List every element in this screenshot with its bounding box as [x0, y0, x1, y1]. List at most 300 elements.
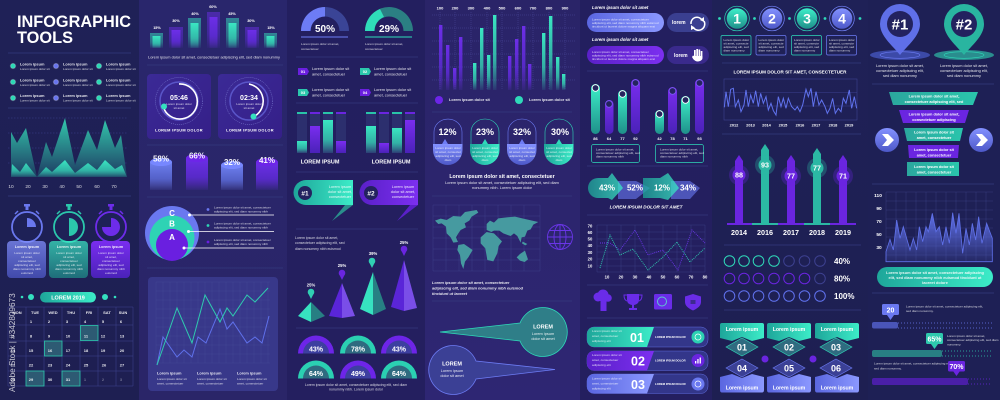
legend grid: Lorem ipsum	[20, 93, 45, 98]
progress bar 65%	[872, 333, 999, 357]
map pin #2: Lorem ipsum dolor sit amet,	[940, 63, 988, 68]
dot progress rows: 100%	[834, 292, 854, 301]
calendar: 4	[84, 319, 87, 324]
vertical bar chart: 800	[546, 6, 553, 10]
row 03: adipiscing elit	[592, 386, 611, 390]
center text block: Lorem ipsum dolor sit amet, consectetuer adipiscing elit, sed diam	[445, 180, 559, 185]
numbered tags: Lorem ipsum dolor sit	[374, 87, 412, 92]
stopwatch purple: Lorem ipsum	[99, 244, 124, 249]
numbered steps: adipiscing elit, sed	[794, 45, 820, 49]
line chart panel: Lorem ipsum dolor sit	[197, 377, 227, 381]
numbered tags: Lorem ipsum dolor sit	[374, 66, 412, 71]
arrow columns: 2018	[809, 228, 825, 237]
numbered steps: 1	[733, 10, 741, 26]
cylinder chart: 58%	[153, 154, 169, 164]
row 02: amet, consectetuer	[592, 358, 618, 362]
timer 02:34: sit amet	[244, 106, 255, 110]
dotted line chart: 40	[588, 243, 593, 248]
venn diagram: Lorem ipsum dolor sit amet, consectetuer	[214, 238, 271, 242]
funnel: consectetuer adipiscing elit, sed	[905, 100, 964, 104]
vertical bar chart: Lorem ipsum dolor sit	[449, 97, 491, 102]
icon: shield	[685, 294, 701, 310]
funnel: amet, consectetuer	[917, 170, 952, 174]
gauge 50%: consectetuer	[301, 47, 319, 51]
pyramid chart: consectetuer adipiscing elit, sed	[295, 241, 345, 245]
bubble #1: consectetuer	[329, 194, 352, 199]
legend grid: Lorem ipsum	[106, 78, 131, 82]
map caption	[432, 280, 524, 296]
teal area chart	[8, 118, 127, 190]
vertical bar chart: 100	[437, 6, 444, 10]
capsule 32%: 32%	[513, 127, 531, 137]
dotted line chart: 30	[633, 274, 638, 280]
funnel: amet, consectetuer	[917, 136, 952, 140]
numbered steps: diam nonummy	[829, 48, 851, 52]
map pin #2: #2	[956, 16, 972, 34]
funnel: consectetuer adipiscing	[912, 118, 956, 122]
line chart panel: amet, consectetuer	[157, 382, 183, 386]
funnel: amet, consectetuer	[917, 154, 952, 158]
capsule 30%: sit amet, consectet	[546, 150, 572, 154]
calendar: SUN	[119, 310, 127, 315]
capsule 30%	[544, 119, 574, 165]
capsule 12%: diam	[445, 158, 452, 162]
bubble #1: dolor sit amet,	[328, 189, 352, 194]
dotted line chart: 20	[588, 256, 593, 262]
yearly line chart: 2014	[762, 122, 772, 128]
stopwatch purple: diam nonummy nibh	[97, 267, 125, 271]
calendar: 16	[48, 348, 53, 353]
dotted line chart: 40	[647, 274, 652, 280]
row 03: 03	[631, 378, 645, 392]
line chart panel	[148, 277, 278, 391]
row 02: 02	[631, 354, 645, 368]
calendar: 20	[120, 348, 125, 353]
row 01: 01	[630, 331, 644, 345]
stopwatch teal	[49, 204, 88, 278]
step cards: Lorem ipsum	[726, 327, 759, 333]
map pin #2: sed diam nonummy	[947, 73, 981, 78]
stopwatch blue: sit amet,	[21, 255, 33, 259]
numbered tags: amet, consectetuer	[312, 92, 346, 98]
teal text pill: laoreet dolore	[922, 280, 949, 285]
pill messages: Lorem ipsum dolor sit amet, consectetuer	[592, 50, 649, 54]
callout blue: Lorem ipsum	[441, 368, 463, 373]
arrow columns: 2016	[757, 228, 773, 237]
numbered steps: diam nonummy	[794, 48, 816, 52]
timer 05:46	[147, 74, 211, 139]
calendar: 15	[29, 348, 34, 353]
capsule 32%: diam	[519, 158, 526, 162]
blue area chart: 90	[876, 206, 882, 212]
venn diagram: Lorem ipsum dolor sit amet, consectetuer	[214, 206, 271, 210]
capsule 23%: Lorem ipsum dolor	[472, 146, 498, 150]
callout teal	[440, 308, 567, 356]
gauge 29%	[365, 7, 413, 51]
pin bars group 1: Lorem ipsum dolor sit amet,	[596, 148, 634, 152]
venn diagram	[145, 206, 274, 261]
row 03: amet, consectetuer	[592, 382, 618, 386]
calendar: TUE	[31, 310, 39, 315]
line chart panel: amet, consectetuer	[237, 382, 263, 386]
arrow columns: 77	[813, 164, 821, 172]
arrow columns	[727, 144, 856, 237]
legend grid: Lorem ipsum	[106, 93, 131, 98]
capsule 12%: sit amet, consectet	[435, 150, 461, 154]
calendar: 7	[12, 334, 15, 338]
timer 02:34	[218, 74, 282, 139]
numbered steps: sit amet, consecte	[724, 42, 749, 46]
stopwatch purple: euismod	[105, 271, 117, 275]
calendar: 5	[102, 319, 105, 324]
line chart panel: Lorem ipsum	[197, 370, 222, 376]
calendar: 28	[11, 377, 16, 382]
icon: cloud money	[594, 290, 612, 311]
gauge 50%: Lorem ipsum dolor sit amet,	[301, 42, 339, 46]
dotted line chart: 50	[588, 236, 593, 242]
capsule 30%: 30%	[551, 127, 569, 137]
arrow columns: 71	[839, 172, 847, 180]
yearly line chart: 2016	[796, 122, 805, 128]
calendar: 18	[84, 348, 89, 353]
capsule 32%: sit amet, consectet	[509, 150, 535, 154]
bubble #2: #2	[367, 190, 375, 198]
icon: hand	[692, 49, 702, 62]
top bar chart	[148, 5, 280, 60]
capsule 12%	[433, 119, 462, 165]
progress bar 70%: sed diam nonummy.	[874, 366, 902, 370]
progress bar 70%: Lorem ipsum dolor sit amet, consectetuer adipiscing elit,	[874, 362, 951, 366]
stopwatch teal: Lorem ipsum dolor	[56, 251, 82, 255]
pill messages: Lorem ipsum dolor sit amet	[592, 37, 649, 42]
calendar: 25	[84, 362, 89, 368]
legend grid: Lorem ipsum dolor sit	[106, 83, 136, 87]
cylinder chart: 66%	[189, 152, 205, 160]
stopwatch blue	[7, 204, 46, 278]
pin bars group 2: consectetuer adipiscing elit, sed	[660, 151, 704, 155]
calendar: 6	[120, 319, 123, 324]
arrow button right	[969, 128, 993, 152]
calendar: 11	[84, 334, 89, 338]
calendar: 12	[101, 334, 106, 338]
line chart panel: Lorem ipsum dolor sit	[157, 377, 187, 381]
numbered steps: Lorem ipsum dolor	[758, 38, 784, 42]
top bar chart: 60%	[209, 5, 217, 9]
top bar chart: 30%	[172, 19, 180, 23]
calendar: 1	[84, 377, 87, 382]
bubble #1: #1	[301, 190, 309, 198]
venn diagram: B	[169, 220, 175, 228]
legend grid: Lorem ipsum dolor sit	[63, 98, 93, 102]
arrow button left	[875, 128, 899, 152]
dot progress rows: 40%	[834, 257, 850, 266]
pill messages: tincidunt ut laoreet dolore magna aliquam erat	[592, 57, 655, 61]
bubble #1: Lorem ipsum	[329, 184, 351, 189]
calendar: SAT	[103, 310, 111, 315]
globe icon	[548, 224, 572, 250]
row 03: Lorem ipsum dolor sit	[592, 376, 622, 380]
pin bars group 1: 92	[633, 136, 638, 141]
line chart panel: Lorem ipsum dolor sit	[237, 377, 267, 381]
vertical bar chart: 300	[468, 6, 475, 10]
yearly line chart: 2015	[779, 122, 788, 128]
percent arrows	[588, 173, 700, 210]
numbered steps: adipiscing elit, sed	[724, 45, 749, 49]
step cards	[720, 323, 859, 392]
cylinder chart: 32%	[224, 158, 240, 167]
pyramid 1: 25%	[307, 282, 315, 288]
yearly line chart: 2012	[730, 122, 739, 128]
pyramid chart: diam nonummy nibh euismod	[295, 247, 341, 251]
pin bars group 2: 78	[670, 136, 675, 141]
teal text pill: elit, sed diam nonummy nibh euismod tincidunt ut	[889, 275, 982, 280]
stopwatch purple: adipiscing elit, sed	[98, 263, 124, 267]
top bar chart: 40%	[191, 12, 199, 16]
vertical bar chart: 200	[452, 6, 459, 10]
calendar: 8	[30, 334, 33, 338]
progress bar 20	[872, 304, 992, 328]
calendar: 23	[48, 362, 53, 368]
dotted line chart: 20	[619, 274, 624, 280]
pill messages: adipiscing elit, sed diam nonummy nibh euismod	[592, 54, 659, 58]
legend grid: Lorem ipsum	[20, 62, 45, 66]
pin bars group 2: Lorem ipsum dolor sit amet,	[660, 148, 698, 152]
dotted line chart: 50	[661, 274, 666, 280]
stopwatch blue: adipiscing elit, sed	[14, 263, 40, 267]
row 03	[587, 374, 708, 394]
top bar chart: 45%	[228, 12, 236, 16]
line chart panel: amet, consectetuer	[197, 382, 223, 386]
stacked bars: LOREM IPSUM	[301, 160, 340, 166]
pin bars group 1: diam nonummy nibh	[596, 154, 624, 158]
step cards: Lorem ipsum	[821, 327, 854, 333]
pill messages: tincidunt ut laoreet dolore magna aliquam erat	[592, 24, 655, 28]
step cards: Lorem ipsum	[773, 386, 806, 392]
line chart panel: Lorem ipsum	[237, 370, 262, 376]
legend grid: Lorem ipsum dolor sit	[20, 83, 50, 87]
percent arrows: 43%	[599, 184, 615, 192]
progress bar 20: Lorem ipsum dolor sit amet, consectetuer adipiscing elit,	[906, 304, 983, 308]
line chart panel: Lorem ipsum	[157, 370, 182, 376]
top bar chart: 15%	[267, 26, 275, 30]
numbered steps	[718, 6, 861, 55]
callout teal: Lorem ipsum	[532, 331, 554, 336]
calendar: MON	[12, 310, 22, 315]
half donut charts: nonummy nibh. Lorem ipsum dolor	[329, 388, 384, 392]
legend grid: Lorem ipsum dolor sit	[106, 98, 136, 102]
timer 05:46: 05:46	[170, 95, 188, 102]
callout blue: LOREM	[442, 362, 462, 368]
stopwatch teal: Lorem ipsum	[57, 244, 82, 249]
calendar: 31	[66, 377, 71, 382]
progress bar 65%: consectetuer adipiscing elit, sed diam	[947, 338, 999, 342]
capsule 23%: 23%	[476, 127, 494, 137]
funnel: Lorem ipsum dolor sit amet,	[909, 112, 959, 116]
row 01: adipiscing elit	[592, 339, 611, 343]
map pin #1: consectetuer adipiscing elit,	[876, 68, 924, 73]
numbered steps: adipiscing elit, sed	[758, 45, 784, 49]
pin bars group 2: 93	[697, 136, 702, 141]
arrow columns: 2014	[731, 228, 747, 237]
teal area chart: 70	[111, 184, 117, 190]
top bar chart: Lorem ipsum dolor sit amet, consectetuer adipiscing elit, sed diam nonummy	[148, 54, 280, 60]
capsule 23%: adipiscing elit, sed	[472, 154, 498, 158]
pin bars group 1	[591, 79, 640, 162]
calendar: 3	[66, 319, 69, 324]
map caption: adipiscing elit, sed diam nonummy nibh euismod	[432, 286, 524, 290]
row 01: amet, consectetuer	[592, 334, 618, 338]
dotted line chart: 30	[588, 250, 593, 255]
calendar: WED	[48, 310, 58, 315]
center text block: nonummy nibh. Lorem ipsum dolor	[472, 185, 533, 190]
icon: safe	[654, 294, 672, 310]
pill messages: adipiscing elit, sed diam nonummy nibh euismod	[592, 21, 659, 25]
funnel: Lorem ipsum dolor sit amet,	[909, 94, 959, 98]
arrow columns: 2019	[835, 228, 851, 237]
cylinder chart: 41%	[259, 156, 275, 165]
numbered tags: amet, consectetuer	[374, 72, 408, 76]
capsule 30%: Lorem ipsum dolor	[546, 146, 572, 150]
gauge 29%: consectetuer	[365, 47, 383, 51]
stopwatch cards	[7, 204, 130, 278]
row 02	[587, 351, 708, 370]
row 02: adipiscing elit	[592, 363, 611, 367]
timer 02:34: Lorem ipsum dolor	[236, 102, 262, 106]
step cards: 04	[737, 364, 747, 374]
capsule 30%: diam	[556, 158, 563, 162]
teal area chart: 30	[42, 184, 48, 190]
numbered tags: amet, consectetuer	[374, 92, 408, 98]
calendar: 19	[101, 348, 106, 353]
stopwatch purple: Lorem ipsum dolor	[98, 251, 124, 255]
numbered tags: 02	[363, 69, 368, 74]
capsule 30%: adipiscing elit, sed	[546, 154, 572, 158]
half donut charts: 43%	[309, 346, 324, 354]
numbered steps: diam nonummy	[724, 48, 745, 52]
row 01: Lorem ipsum dolor sit	[592, 329, 622, 333]
calendar: 2	[102, 377, 105, 382]
icon row	[594, 290, 701, 311]
legend grid: Lorem ipsum	[106, 62, 131, 66]
step cards: 05	[784, 364, 794, 374]
list rows	[587, 327, 708, 394]
capsule 23%: sit amet, consectet	[472, 150, 498, 154]
numbered steps: sit amet, consecte	[758, 42, 784, 46]
callout teal: dolor sit amet	[531, 336, 556, 341]
pyramid 2: 25%	[338, 263, 346, 268]
capsule 23%	[470, 119, 500, 165]
numbered steps: sit amet, consecte	[829, 42, 854, 46]
half donut charts	[298, 336, 417, 392]
numbered tags: amet, consectetuer	[312, 72, 346, 76]
arrow columns: 2017	[783, 228, 799, 237]
legend grid: Lorem ipsum	[63, 78, 88, 82]
legend grid: Lorem ipsum dolor sit	[106, 67, 136, 71]
half donut charts: 43%	[392, 346, 407, 354]
funnel: Lorem ipsum dolor sit	[914, 148, 955, 152]
stopwatch purple: sit amet,	[105, 255, 117, 259]
teal area chart: 40	[59, 184, 65, 190]
stacked bars: LOREM IPSUM	[372, 160, 411, 166]
map caption: Lorem ipsum dolor sit amet, consectetuer	[432, 280, 510, 285]
calendar: 27	[120, 362, 125, 368]
gauge 29%: Lorem ipsum dolor sit amet,	[365, 42, 403, 46]
pill messages: lorem	[674, 53, 688, 59]
capsule 12%: 12%	[438, 127, 457, 137]
teal text pill: Lorem ipsum dolor sit amet, consectetuer adipiscing	[886, 270, 984, 275]
half donut charts: Lorem ipsum dolor sit amet, consectetuer adipiscing elit, sed diam	[305, 383, 407, 387]
stopwatch teal: diam nonummy nibh	[55, 267, 83, 271]
vertical bar chart: 900	[562, 6, 569, 10]
vertical bar chart: 400	[484, 6, 491, 10]
pin bars group 2	[655, 79, 704, 162]
calendar: 3	[120, 377, 123, 382]
center text block: Lorem ipsum dolor sit amet, consectetuer	[449, 174, 555, 180]
legend grid: Lorem ipsum dolor sit	[63, 83, 93, 87]
top bar chart: 30%	[247, 19, 255, 23]
calendar: 10	[66, 334, 71, 338]
map pin #1: sed diam nonummy	[883, 73, 917, 78]
numbered tags: 03	[301, 90, 306, 95]
stock id label: Adobe Stock | #342809673	[8, 293, 17, 392]
icon: trophy	[624, 294, 642, 310]
progress bar 65%: 65%	[927, 336, 942, 344]
pin bars group 1: 77	[620, 136, 625, 141]
pin bars group 1: 86	[593, 136, 598, 141]
bubble #2: dolor sit amet,	[391, 189, 415, 194]
teal area chart: 50	[76, 184, 82, 190]
half donut charts: 64%	[309, 371, 324, 378]
timer cards	[147, 74, 282, 139]
venn diagram: adipiscing elit, sed diam nonummy nibh	[214, 242, 268, 246]
step cards: 02	[784, 342, 794, 352]
stacked bars	[297, 112, 415, 166]
blue area chart: 50	[876, 232, 882, 238]
half donut charts: 78%	[351, 346, 366, 354]
stopwatch teal: sit amet,	[63, 255, 75, 259]
arrow columns: 88	[735, 170, 743, 180]
half donut charts: 49%	[351, 371, 366, 378]
funnel: Lorem ipsum dolor sit	[914, 130, 955, 134]
percent arrows: 52%	[627, 184, 643, 192]
stopwatch blue: consectetuer	[18, 259, 36, 263]
callout blue	[429, 345, 555, 394]
numbered steps: 3	[803, 10, 811, 26]
numbered steps: Lorem ipsum dolor	[794, 38, 820, 42]
legend grid	[10, 62, 136, 102]
step cards: Lorem ipsum	[773, 327, 806, 333]
timer 05:46: LOREM IPSUM DOLOR	[155, 128, 203, 132]
gauge 50%: 50%	[315, 24, 335, 35]
step cards: 01	[737, 342, 747, 352]
calendar: 13	[120, 334, 125, 338]
timer 05:46: Lorem ipsum dolor	[166, 102, 192, 106]
stopwatch teal: consectetuer	[60, 259, 78, 263]
vertical bar chart: 600	[515, 6, 522, 10]
map pin #2	[934, 4, 994, 78]
venn diagram: C	[169, 209, 175, 218]
calendar: 29	[29, 377, 34, 382]
progress bar 65%: nonummy.	[947, 342, 961, 346]
dotted line chart: 60	[588, 230, 593, 235]
row 01	[587, 327, 708, 347]
timer 05:46: sit amet	[174, 106, 185, 110]
calendar: 30	[48, 377, 53, 382]
pill messages	[587, 5, 709, 64]
progress bar 65%: Lorem ipsum dolor sit amet,	[947, 334, 985, 338]
capsule 32%: Lorem ipsum dolor	[509, 146, 535, 150]
dotted line chart: 10	[605, 274, 610, 280]
